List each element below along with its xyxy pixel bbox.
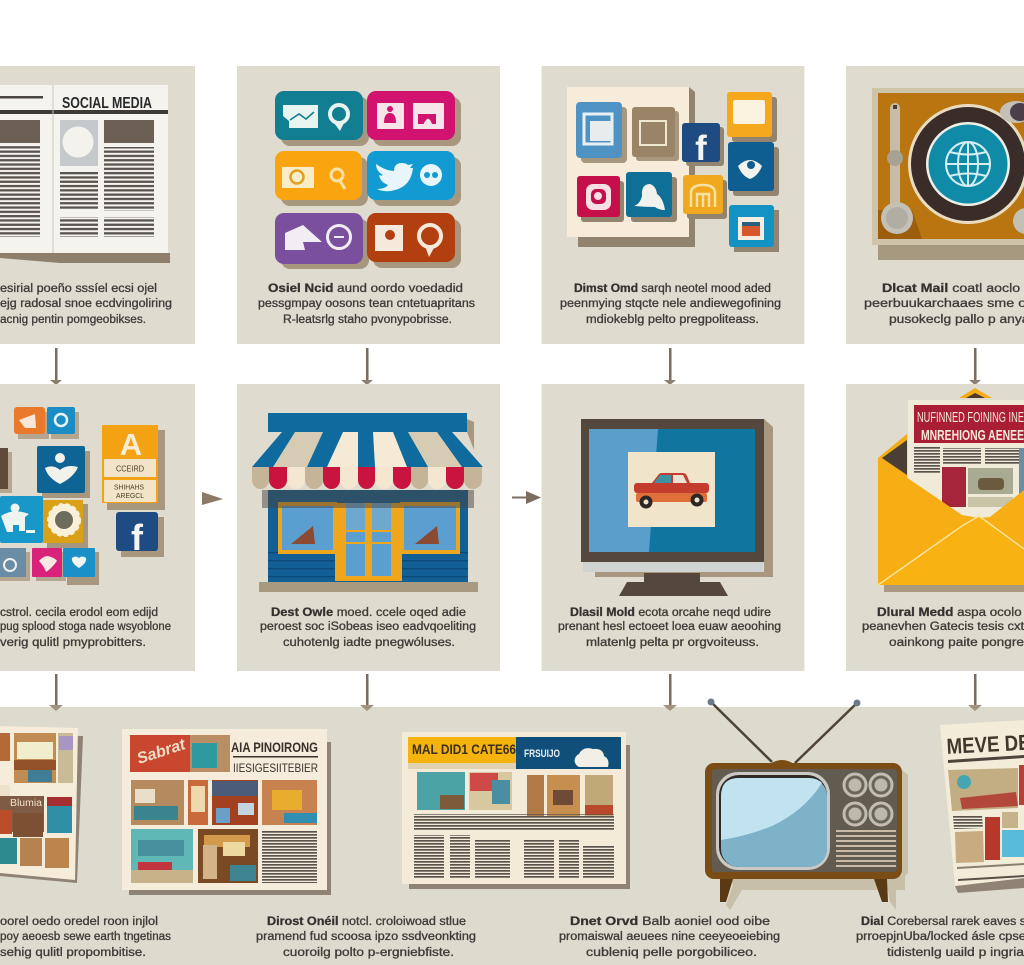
panel: bottom row media band [0,698,1024,965]
icon: label card with letter A: AREGCL [116,493,144,500]
icon: magazine spread: IIESIGESIITEBIER [233,761,318,775]
icon: sun tile [43,500,88,548]
icon: label card with letter A: A [120,427,142,462]
icon: people tile [0,496,43,543]
panel: row 2 storefront [237,384,500,671]
text block: Dirost Onéil notcl. croloiwoad stlue [267,916,466,928]
text block: Dest Owle moed. ccele oqed adie [271,607,466,619]
panel: row 1 newspaper [0,66,195,344]
icon: cyan tile [729,205,779,252]
icon: tilted newspaper right [940,720,1024,893]
icon: label card with letter A: CCEIRD [116,464,144,474]
arrow: row 2 to row 3 column 2 [360,674,374,711]
text block [260,607,476,649]
text block: Dial Corebersal rarek eaves s [861,916,1024,928]
icon: envelope with flyer [878,388,1024,592]
icon: heart tile [37,446,90,498]
icon: shop front [252,413,483,592]
text block [256,916,476,959]
icon: magazine spread [122,729,331,895]
text block: acnig pentin pomgeobikses. [0,314,146,326]
arrow: row 1 to row 2 column 4 [969,348,981,385]
arrow: row 2 column 1 to column 2 [202,492,223,505]
icon: orange tile [14,407,49,439]
panel: row 1 social media buttons [237,66,500,344]
text block: R-leatsrlg staho pvonypobrisse. [283,314,452,326]
icon: tilted magazine left: Blumia [10,798,42,809]
icon: pink tile [32,548,66,581]
text block: sehig qulitl propombitise. [0,947,146,959]
text block [856,916,1024,959]
icon: pink tile [367,91,461,146]
icon: teal tile [275,91,369,146]
text block: pessgmpay oosons tean cntetuapritans [258,298,475,310]
text block: pramend fud scoosa ipzo ssdveonkting [256,931,476,943]
icon: facebook tile [682,123,724,168]
icon: document tile [576,102,627,163]
arrow: row 2 to row 3 column 3 [663,674,677,711]
text block: Osiel Ncid aund oordo voedadid [268,283,463,295]
text block: ejg radosal snoe ecdvingoliring [0,298,172,310]
icon: facebook tile [116,512,164,558]
text block: poy aeoesb sewe earth tngetinas [0,931,171,943]
icon: facebook tile: f [695,129,707,168]
icon: label card with letter A: SHIHAHS [114,484,144,492]
text block: peenmying stqcte nele andiewegofining [560,298,781,310]
text block [864,283,1024,326]
text block: pusokeclg pallo p anyar [889,314,1024,326]
text block [560,283,781,326]
text block: Dlural Medd aspa ocolo s [877,607,1024,619]
icon: rust tile [367,213,461,268]
icon: brown tile [632,107,679,161]
text block: peerbuukarchaaes sme oro [864,298,1024,310]
text block: oorel oedo oredel roon injlol [0,916,158,928]
icon: retro television [705,698,908,910]
icon: steel tile [0,548,30,581]
icon: magazine spread: Sabrat [135,736,188,768]
text block: verig qulitl pmyprobitters. [0,637,146,649]
text block: Dlcat Mail coatl aoclo a [882,283,1024,295]
arrow: row 1 to row 2 column 3 [664,348,676,385]
text block [0,283,172,326]
icon: label card with letter A [102,425,165,510]
icon: orange tile [275,151,368,206]
icon: magazine spread: AIA PINOIRONG [231,739,318,755]
icon: newsletter: MAL DID1 CATE66 [412,741,516,757]
text block [258,283,475,326]
text block: cubleniq pelle porgobiliceo. [586,947,757,959]
text block: mlatenlg pelta pr orgvoiteuss. [586,637,759,649]
arrow: row 2 to row 3 column 1 [49,674,63,711]
icon: yellow tile [683,175,727,219]
arrow: row 2 to row 3 column 4 [968,674,982,711]
icon: teal tile [626,172,677,222]
icon: tilted magazine left [0,726,83,883]
icon: facebook tile: f [131,517,144,558]
text block: prroepjnUba/locked ásle cpse [856,931,1024,943]
text block: Dimst Omd sarqh neotel mood aded [574,283,771,295]
text block: Dlasil Mold ecota orcahe neqd udire [570,607,771,619]
arrow: row 1 to row 2 column 2 [361,348,373,385]
text block: cuoroilg polto p-ergniebfiste. [283,947,454,959]
icon: blue tile [47,407,79,439]
text block: promaiswal aeuees nine ceeyeoeiebing [559,931,780,943]
text block: cstrol. cecila erodol eom edijd [0,607,158,619]
icon: brown tile [0,448,12,493]
panel: row 2 computer monitor [542,384,804,671]
icon: open newspaper: SOCIAL MEDIA [62,95,152,112]
panel: row 1 app icons on sheet [542,66,804,344]
icon: twitter tile [367,151,461,206]
text block: cuhotenlg iadte pnegwóluses. [283,637,455,649]
text block: mdiokeblg pelto pregpoliteass. [586,314,759,326]
icon: heart tile blue [63,548,99,585]
panel: row 2 app icons [0,384,195,671]
arrow: row 2 column 2 to column 3 [512,491,541,504]
icon: newsletter [402,732,630,889]
text block [559,916,780,959]
panel: row 2 envelope [846,384,1024,671]
icon: blue tile [728,142,779,196]
text block [0,607,171,649]
text block [0,916,171,959]
icon: open newspaper [0,85,170,263]
text block [862,607,1024,649]
text block: esirial poeño sssíel ecsi ojel [0,283,157,295]
text block: peroest soc iSobeas iseo eadvqoeliting [260,621,476,633]
panel: row 1 turntable [846,66,1024,344]
text block [558,607,781,649]
arrow: row 1 to row 2 column 1 [50,348,62,385]
text block: prenant hesl ectoeet loea euaw aeoohing [558,621,781,633]
icon: monitor with car [581,419,773,596]
icon: orange tile [727,92,777,142]
icon: newsletter: FRSUIJO [524,748,560,760]
text block: oainkong paite pongre [889,637,1024,649]
text block: tidistenlg uaild p ingria [887,947,1024,959]
icon: cream sheet [567,87,695,247]
text block: peanevhen Gatecis tesis cxti [862,621,1024,633]
icon: record turntable [872,88,1024,260]
icon: crimson tile [577,176,624,222]
text block: Dnet Orvd Balb aoniel ood oibe [570,916,770,928]
icon: purple tile [275,213,369,269]
text block: pug splood stoga nade wsyoblone [0,621,171,633]
